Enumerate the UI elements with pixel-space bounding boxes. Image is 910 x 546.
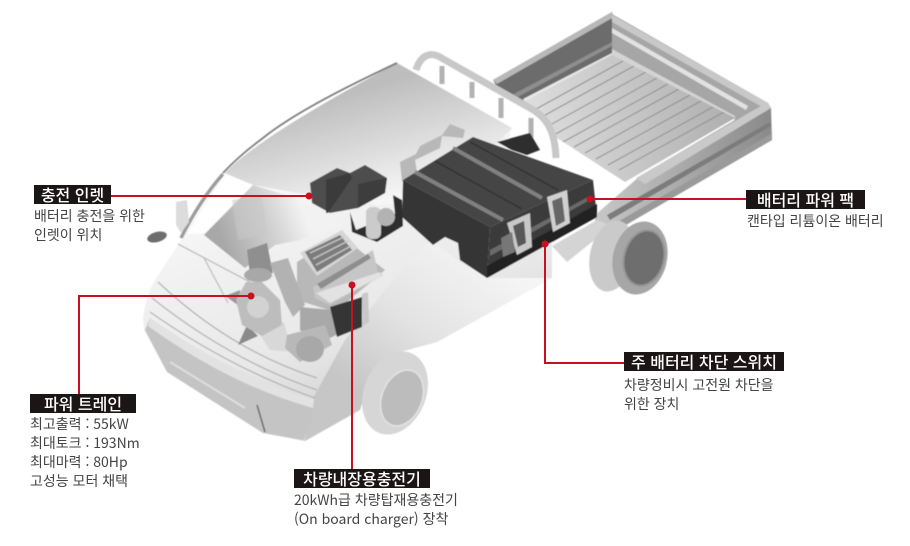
label: charging inlet: 충전 인렛 (41, 182, 104, 206)
label: power train: 최대토크 : 193Nm (30, 433, 140, 453)
label: battery power pack: 배터리 파워 팩 (757, 187, 854, 211)
label: main battery cutoff switch: 주 배터리 차단 스위치 (631, 349, 777, 373)
coolant pump bracket (350, 195, 403, 242)
bumper (145, 318, 314, 440)
line: battery pack (590, 198, 746, 200)
battery switch frames (507, 213, 532, 255)
roll bar (416, 55, 556, 158)
label: main battery cutoff switch (624, 349, 784, 414)
hood lines (178, 244, 250, 303)
junction box (310, 165, 387, 213)
side mirror (176, 200, 189, 233)
battery pack (400, 124, 597, 278)
label: power train: 파워 트레인 (44, 391, 122, 415)
leader dots (248, 192, 594, 300)
a pillar (181, 174, 223, 238)
truck bed (493, 12, 772, 262)
label: on board charger: (On board charger) 장착 (294, 509, 448, 529)
engine and power train (225, 235, 385, 362)
label: power train: 최고출력 : 55kW (30, 414, 129, 434)
label: battery power pack (746, 187, 884, 231)
leader lines (79, 196, 746, 469)
label: power train: 최대마력 : 80Hp (30, 452, 128, 472)
label: charging inlet (34, 182, 145, 245)
line: cutoff switch (545, 243, 624, 363)
label: power train (30, 391, 140, 491)
line: charging inlet (110, 195, 309, 197)
label: main battery cutoff switch: 위한 장치 (624, 394, 679, 414)
label: on board charger: 차량내장용충전기 (303, 466, 421, 490)
label: on board charger (294, 466, 458, 529)
label: charging inlet: 인렛이 위치 (34, 225, 102, 245)
window opening (187, 174, 253, 234)
interior (204, 185, 345, 268)
label: main battery cutoff switch: 차량정비시 고전원 차단을 (624, 375, 774, 395)
side sill (552, 220, 612, 262)
tailgate (594, 103, 772, 240)
cab body (143, 63, 552, 441)
rear wheel (583, 216, 675, 300)
label: on board charger: 20kWh급 차량탑재용충전기 (294, 490, 458, 510)
label: battery power pack: 캔타입 리튬이온 배터리 (747, 211, 884, 231)
cab side (305, 240, 552, 441)
front wheel (350, 342, 440, 444)
on board charger (300, 230, 383, 337)
line: power train (79, 296, 251, 394)
truck illustration (78, 12, 773, 469)
roof (225, 63, 512, 205)
line: on board charger (351, 285, 353, 469)
label: charging inlet: 배터리 충전을 위한 (34, 206, 145, 226)
label: power train: 고성능 모터 채택 (30, 471, 128, 491)
